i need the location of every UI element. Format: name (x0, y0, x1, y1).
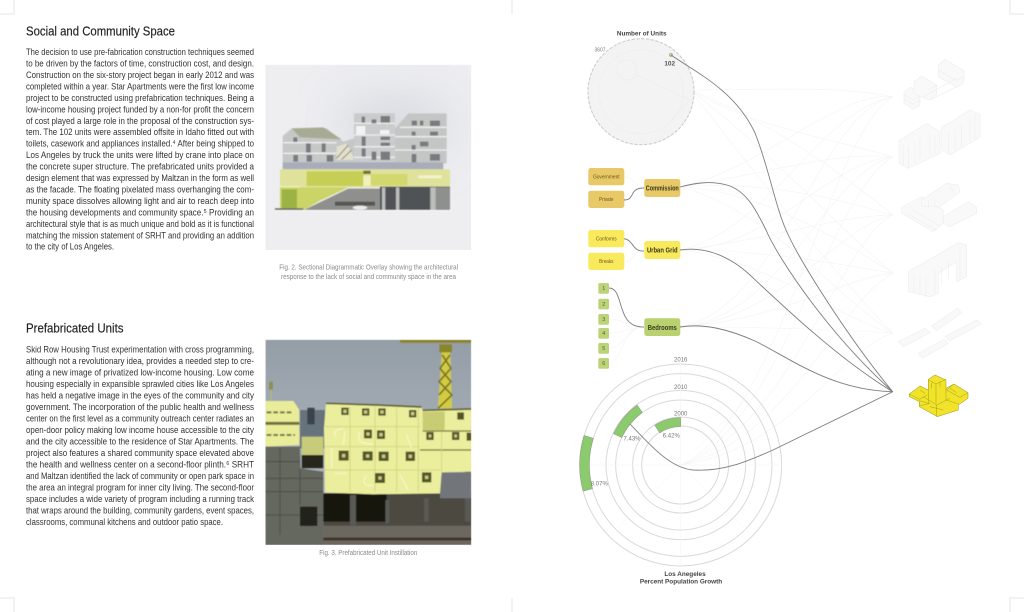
text block: social and community space body: toilets, casework and appliances installed.⁴ After being shipped to (26, 139, 254, 150)
text block: prefabricated units body: the area an integral program for inner city living. The second-floor (26, 482, 255, 493)
labels: radial chart years and percentages: 6.42% (663, 434, 680, 440)
faint network connections (609, 89, 893, 465)
isometric massing: option 2 (899, 110, 980, 168)
text block: prefabricated units body: Skid Row Housing Trust experimentation with cross programming, (26, 344, 254, 355)
node group: bedrooms: Bedrooms (648, 325, 677, 332)
text block: social and community space body (26, 47, 255, 253)
text block: social and community space body: matching the mission statement of SRHT and providing an addition (26, 230, 254, 241)
arc: 2016 (580, 435, 593, 491)
text block: social and community space body: to be driven by the factors of time, construction cost, and design. (26, 58, 254, 70)
arc: 2010 (614, 405, 642, 437)
text block: social and community space body: the housing developments and community space.⁵ Providing an (26, 207, 254, 218)
node group: urban grid: Breaks (599, 259, 614, 265)
figure 3: prefabricated unit installation photo (265, 340, 471, 545)
caption: figure 2: Fig. 2. Sectional Diagrammatic Overlay showing the architectural (279, 265, 458, 272)
labels: radial chart years and percentages: 2000 (674, 412, 688, 418)
text block: prefabricated units body: has held a negative image in the eyes of the community and city (26, 390, 254, 401)
labels: radial chart years and percentages: 8.07% (591, 482, 608, 488)
node group: bedrooms: 2 (602, 302, 605, 308)
node group: commission: Private (599, 197, 613, 203)
label: 102: 102 (664, 60, 675, 68)
text block: prefabricated units body: space includes a wide variety of program including a running track (26, 494, 254, 505)
node group: commission: Commission (646, 186, 679, 192)
node group: commission (588, 168, 680, 208)
text block: social and community space body: of cost played a large role in the proposal of the construction sys- (26, 116, 254, 127)
node group: bedrooms: 6 (602, 361, 605, 367)
caption: figure 3: Fig. 3. Prefabricated Unit Instillation (319, 550, 417, 557)
text block: social and community space body: as the facade. The floating pixelated mass overhanging the com- (26, 184, 254, 196)
labels: radial chart years and percentages (591, 358, 688, 488)
text block: social and community space body: Los Angeles by truck the units were lifted by crane into place on (26, 150, 254, 161)
text block: prefabricated units body: center on the first level as a community outreach center radiates an (26, 413, 254, 424)
isometric massing: option 4 (908, 243, 967, 297)
isometric massing: selected yellow option (909, 375, 968, 417)
node group: bedrooms (598, 283, 680, 369)
chart title: Number of Units: Number of Units (617, 30, 667, 38)
isometric massing: option 5 (898, 308, 981, 358)
labels: radial chart years and percentages: 2010 (674, 385, 688, 391)
text block: social and community space body: completed within a year. Star Apartments were the first low income (26, 81, 254, 92)
heading: Prefabricated Units: Prefabricated Units (26, 322, 124, 336)
labels: radial chart years and percentages: 7.43% (623, 436, 641, 442)
text block: prefabricated units body: government. The incorporation of the public health and wellness (26, 402, 254, 413)
text block: prefabricated units body: open-door policy making low income house accessible to the city (26, 425, 254, 436)
text block: prefabricated units body: project also features a shared community space elevated above (26, 448, 254, 459)
text block: social and community space body: Construction on the six-story project began in early 2012 and was (26, 70, 254, 81)
node group: urban grid (588, 230, 680, 270)
node group: bedrooms: 4 (602, 331, 605, 337)
arc: 2000 (655, 418, 681, 433)
highlighted connection lines (609, 55, 893, 470)
text block: social and community space body: munity space dissolves allowing light and air to reach deep into (26, 196, 254, 207)
text block: social and community space body: tem. The 102 units were assembled offsite in Idaho fitted out with (26, 127, 254, 138)
chart title: Los Angeles percent population growth: Los Anegeles (664, 571, 706, 578)
text block: social and community space body: The decision to use pre-fabrication construction techniques seemed (26, 47, 254, 58)
heading: Social and Community Space: Social and Community Space (26, 24, 175, 38)
text block: prefabricated units body: although not a revolutionary idea, provides a needed step to cre- (26, 356, 254, 367)
text block: social and community space body: architectural style that is as much unique and bold as it is functional (26, 219, 254, 230)
text block: prefabricated units body: classrooms, communal kitchens and outdoor patio space. (26, 517, 223, 528)
text block: prefabricated units body: and Maltzan identified the lack of community or open park space in (26, 471, 254, 482)
figure 2: sectional diagrammatic overlay (265, 65, 471, 250)
text block: prefabricated units body (26, 344, 255, 528)
text block: prefabricated units body: ating a new image of privatized low-income housing. Low come (26, 367, 254, 378)
text block: prefabricated units body: housing especially in expansible sprawled cities like Los Angeles (26, 379, 254, 390)
text block: social and community space body: the concrete super structure. The prefabricated units provided a (26, 162, 255, 173)
chart title: Los Angeles percent population growth (640, 571, 722, 586)
text block: prefabricated units body: the health and wellness center on a second-floor plinth.⁶ SRHT (26, 459, 254, 470)
node group: bedrooms: 1 (602, 286, 605, 292)
text block: social and community space body: low-income housing project funded by a non-for profit the concern (26, 104, 254, 115)
text block: social and community space body: project to be constructed using prefabrication techniques. Being a (26, 93, 255, 104)
text block: social and community space body: design element that was expressed by Maltzan in the form as well (26, 173, 254, 184)
labels: radial chart years and percentages: 2016 (674, 358, 688, 364)
caption: figure 2: response to the lack of social and community space in the area (281, 274, 456, 281)
text block: prefabricated units body: and the city accessible to the residence of Star Apartments. The (26, 436, 254, 447)
radial chart: Los Angeles percent population growth (580, 364, 782, 566)
chart: number of units bubble (588, 39, 694, 145)
isometric massing: option 1 (904, 59, 964, 109)
node group: commission: Government (593, 175, 620, 181)
node group: urban grid: Urban Grid (647, 248, 678, 254)
text block: prefabricated units body: that wraps around the building, community gardens, event spaces, (26, 505, 254, 516)
chart title: Los Angeles percent population growth: Percent Population Growth (640, 578, 722, 586)
node group: bedrooms: 3 (602, 317, 605, 323)
label: total units: 3607 (594, 48, 606, 54)
node group: urban grid: Conforms (596, 237, 617, 243)
text block: social and community space body: to the city of Los Angeles. (26, 242, 114, 253)
caption: figure 2 (279, 265, 458, 281)
marker: 102 units (669, 53, 673, 57)
node group: bedrooms: 5 (602, 346, 605, 352)
isometric massing: option 3 (902, 183, 977, 232)
